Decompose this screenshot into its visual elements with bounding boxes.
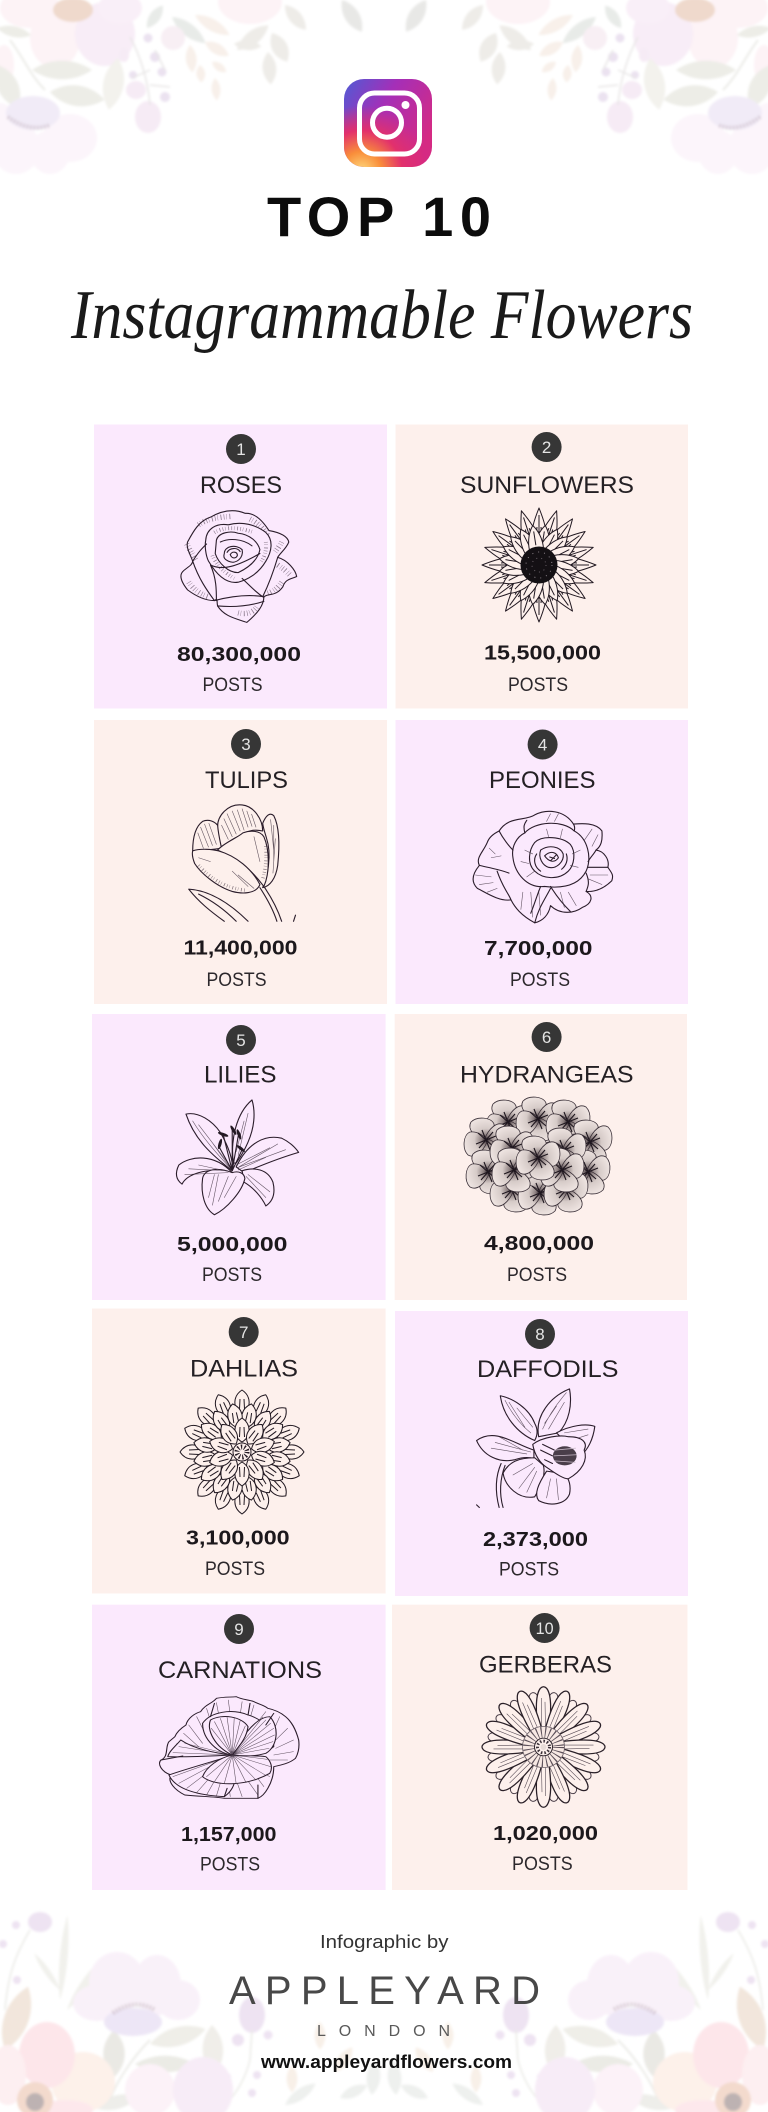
number badge 4 [528, 730, 558, 760]
caption: posts: POSTS [205, 1559, 265, 1580]
panel: 5 lilies [92, 1014, 386, 1300]
icon: carnation [160, 1697, 299, 1798]
panel: 3 tulips [94, 720, 387, 1004]
caption: posts: POSTS [206, 970, 266, 991]
panel: 2 sunflowers [396, 424, 688, 708]
value: carnations posts: 1,157,000 [181, 1823, 276, 1846]
caption: posts: POSTS [510, 970, 570, 991]
value: roses posts: 80,300,000 [177, 643, 301, 666]
number badge 2 [532, 432, 562, 462]
value: gerberas posts: 1,020,000 [493, 1822, 598, 1845]
number badge 2: 2 [542, 438, 551, 457]
footer: website: www.appleyardflowers.com [260, 2051, 512, 2072]
panel: 9 carnations [92, 1605, 386, 1890]
label: lilies: LILIES [204, 1062, 276, 1089]
value: sunflowers posts: 15,500,000 [484, 642, 601, 664]
icon: peony [473, 811, 613, 923]
caption: posts: POSTS [499, 1560, 559, 1581]
panel: 1 roses [94, 424, 387, 708]
number badge 4: 4 [538, 736, 547, 754]
number badge 8 [525, 1319, 555, 1349]
floral decoration: bottom left [0, 1912, 382, 2112]
icon: rose [181, 511, 297, 622]
number badge 9: 9 [234, 1620, 244, 1639]
icon: tulip [189, 805, 295, 921]
footer: infographic by: Infographic by [320, 1931, 449, 1952]
icon: instagram logo [344, 79, 432, 167]
label: carnations: CARNATIONS [158, 1657, 322, 1684]
label: peonies: PEONIES [489, 767, 596, 794]
number badge 7: 7 [239, 1323, 248, 1342]
number badge 10: 10 [536, 1619, 554, 1638]
label: daffodils: DAFFODILS [477, 1356, 618, 1383]
icon: gerbera [477, 1682, 610, 1812]
number badge 6 [532, 1022, 562, 1052]
caption: posts: POSTS [507, 1265, 567, 1286]
caption: posts: POSTS [508, 675, 568, 696]
caption: posts: POSTS [200, 1855, 260, 1876]
title: top 10: TOP 10 [267, 185, 491, 248]
number badge 1: 1 [236, 440, 246, 459]
value: peonies posts: 7,700,000 [484, 937, 592, 960]
value: tulips posts: 11,400,000 [184, 936, 298, 960]
label: hydrangeas: HYDRANGEAS [460, 1062, 634, 1089]
panel: 7 dahlias [92, 1308, 386, 1594]
label: sunflowers: SUNFLOWERS [460, 472, 634, 499]
caption: posts: POSTS [512, 1854, 573, 1875]
number badge 6: 6 [542, 1028, 551, 1047]
value: hydrangeas posts: 4,800,000 [484, 1232, 594, 1255]
footer: london: LONDON [317, 2023, 450, 2040]
icon: lily [176, 1100, 299, 1215]
footer: appleyard logo wordmark: APPLEYARD [229, 1969, 540, 2013]
label: roses: ROSES [200, 472, 282, 499]
value: lilies posts: 5,000,000 [177, 1233, 288, 1256]
icon: daffodil [477, 1389, 595, 1508]
number badge 5: 5 [236, 1031, 246, 1050]
number badge 10 [530, 1613, 560, 1643]
floral decoration: top left [0, 0, 368, 174]
label: dahlias: DAHLIAS [190, 1356, 298, 1383]
value: daffodils posts: 2,373,000 [483, 1528, 588, 1551]
icon: dahlia [180, 1390, 304, 1514]
panel: 6 hydrangeas [395, 1014, 687, 1300]
panel: 10 gerberas [392, 1605, 688, 1890]
caption: posts: POSTS [202, 675, 262, 696]
icon: sunflower [482, 508, 596, 622]
number badge 7 [229, 1317, 259, 1347]
number badge 3 [231, 729, 261, 759]
value: dahlias posts: 3,100,000 [186, 1527, 290, 1550]
number badge 3: 3 [241, 735, 251, 754]
floral decoration: top right [400, 0, 768, 174]
title: instagrammable flowers script: Instagrammable Flowers [70, 277, 693, 354]
number badge 8: 8 [535, 1325, 545, 1344]
panel: 4 peonies [396, 720, 688, 1004]
label: gerberas: GERBERAS [479, 1652, 612, 1679]
floral decoration: bottom right [386, 1912, 768, 2112]
panel: 8 daffodils [395, 1311, 688, 1596]
number badge 9 [224, 1614, 254, 1644]
number badge 1 [226, 434, 256, 464]
label: tulips: TULIPS [205, 767, 288, 794]
number badge 5 [226, 1025, 256, 1055]
icon: hydrangea [464, 1097, 612, 1215]
caption: posts: POSTS [202, 1265, 262, 1286]
